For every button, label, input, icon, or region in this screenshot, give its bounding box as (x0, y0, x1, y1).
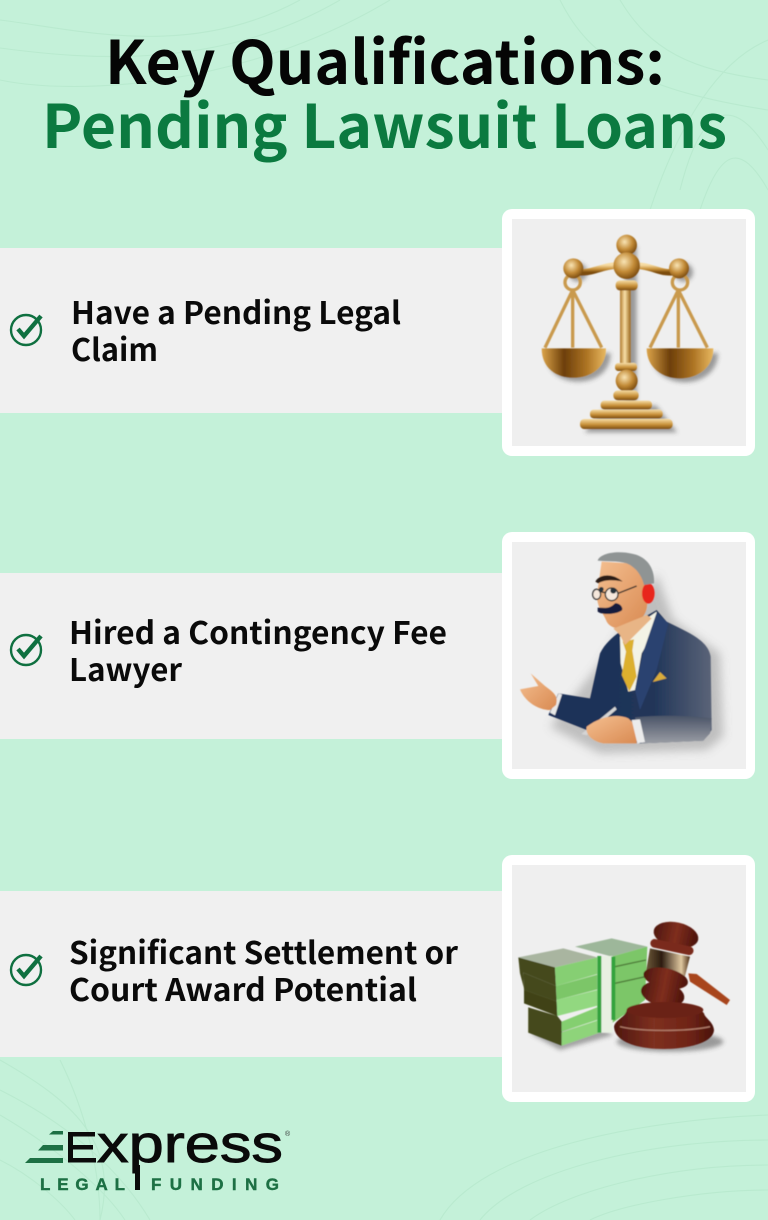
panel: settlement potential (0, 891, 503, 1057)
icon: money and gavel (518, 918, 730, 1052)
icon: lawyer (520, 552, 723, 753)
logo subtitle: FUNDING (151, 1175, 279, 1194)
text: significant settlement: Significant Settlement or (69, 928, 458, 973)
icon: check 2 (11, 635, 41, 665)
text: have a pending legal claim (71, 288, 401, 370)
icon: check 1 (11, 315, 41, 345)
image card: money and gavel (502, 855, 755, 1102)
panel: pending legal claim (0, 248, 503, 413)
text: significant settlement (69, 928, 458, 1010)
panel: contingency fee lawyer (0, 573, 503, 739)
title: Pending Lawsuit Loans (42, 79, 727, 166)
image card: scales of justice (502, 209, 755, 456)
text: have a pending legal claim: Have a Pending Legal (71, 288, 401, 333)
text: have a pending legal claim: Claim (71, 325, 158, 370)
image card: lawyer (502, 532, 755, 779)
logo subtitle: LEGAL (40, 1175, 125, 1194)
logo subtitle (40, 1175, 279, 1194)
title: Key Qualifications: (105, 15, 665, 102)
text: significant settlement: Court Award Potential (69, 965, 417, 1010)
text: hired a contingency fee lawyer: Hired a Contingency Fee (69, 608, 447, 653)
title (42, 15, 727, 166)
logo wordmark: ® (285, 1130, 291, 1138)
logo wordmark: xpress (97, 1115, 283, 1174)
icon: check 3 (11, 955, 41, 985)
text: hired a contingency fee lawyer: Lawyer (69, 645, 182, 690)
logo wordmark (68, 1115, 291, 1190)
icon: scales (542, 235, 718, 432)
text: hired a contingency fee lawyer (69, 608, 447, 690)
logo (25, 1115, 291, 1194)
logo stripes (25, 1131, 63, 1163)
